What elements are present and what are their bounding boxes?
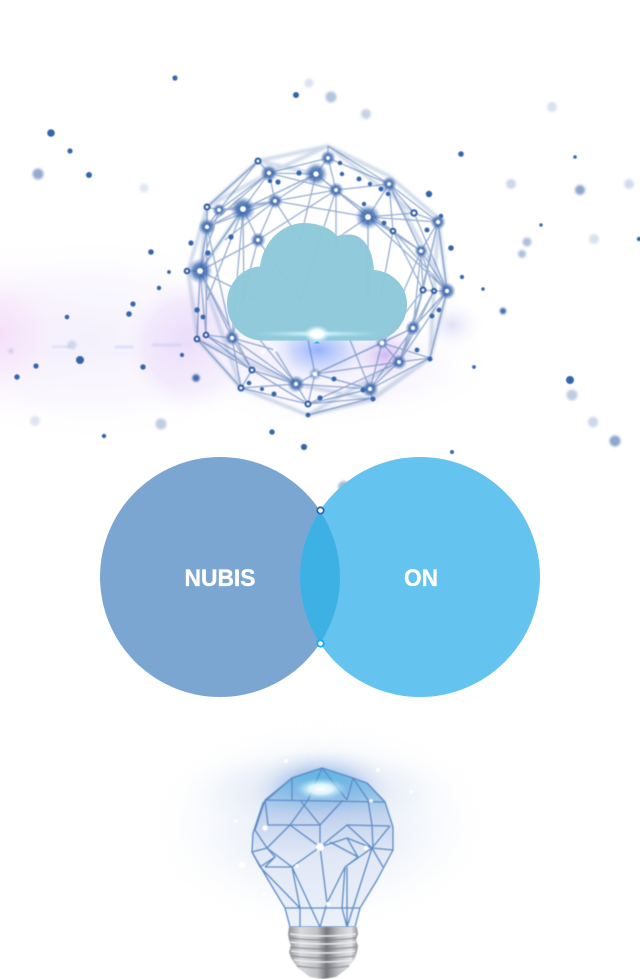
label: ON: ON — [404, 565, 438, 592]
bulb screw base — [288, 927, 358, 979]
sphere outer hazy ring — [188, 146, 447, 415]
sphere node cores — [197, 156, 449, 391]
bulb glass — [252, 768, 393, 927]
scattered particles: solid blue — [14, 75, 640, 504]
bulb top flare — [295, 778, 347, 800]
cloud — [227, 223, 407, 341]
overlap lens — [300, 511, 340, 643]
sphere satellite dots — [194, 161, 443, 417]
scattered particles: mid blur — [192, 308, 506, 382]
bulb halo — [145, 715, 495, 935]
circle: NUBIS — [100, 457, 340, 697]
bottom intersection marker — [317, 640, 324, 647]
background nebula glow — [0, 235, 500, 445]
light bulb — [145, 715, 495, 979]
venn diagram — [100, 457, 540, 697]
sphere ring nodes — [185, 159, 436, 406]
network sphere — [185, 146, 456, 417]
label: NUBIS: NUBIS — [184, 565, 256, 592]
top intersection marker — [317, 507, 324, 514]
sphere node halos — [187, 150, 456, 398]
circle: ON — [300, 457, 540, 697]
bulb wireframe — [252, 768, 393, 927]
cloud base flare — [255, 325, 380, 344]
scattered particles: blurred pale — [8, 78, 634, 510]
light streaks left — [48, 344, 182, 355]
sphere wire mesh — [187, 146, 447, 415]
bulb sparkles — [234, 759, 412, 906]
